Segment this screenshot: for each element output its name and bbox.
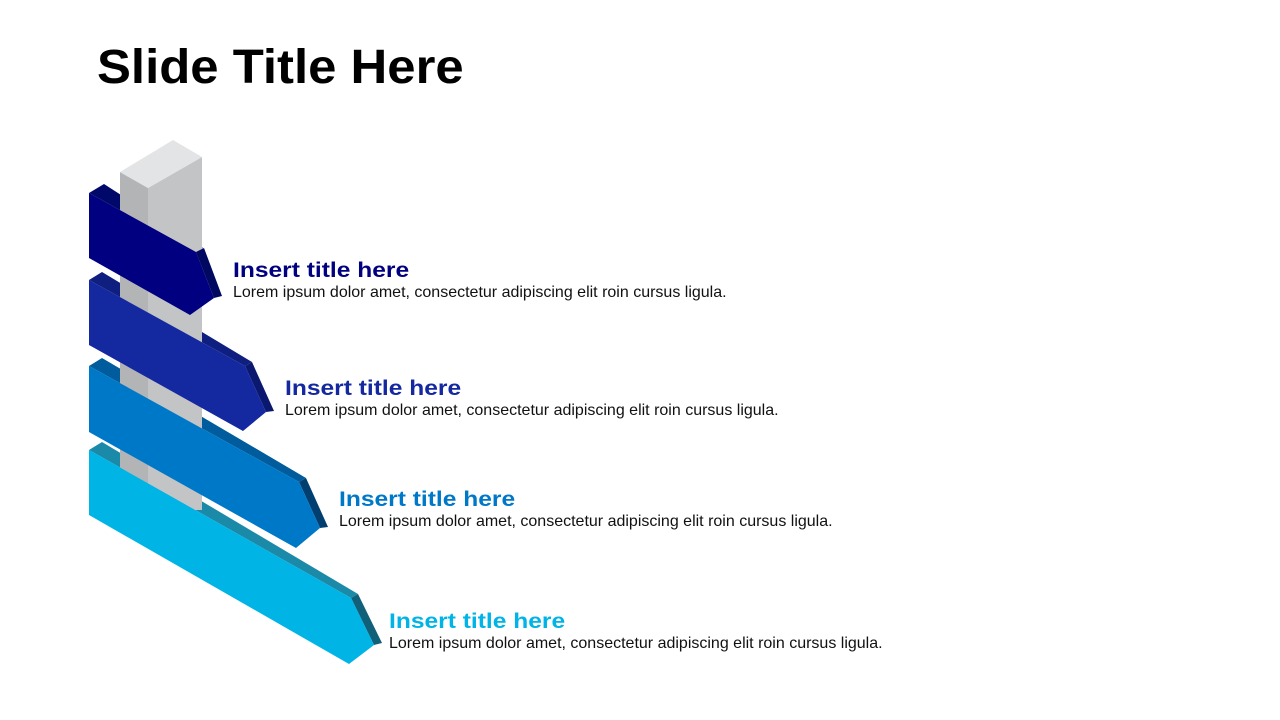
text block 1 [233,259,727,301]
text block 1: Insert title here [233,259,409,282]
arrow 1 [89,193,222,315]
text block 1: Lorem ipsum dolor amet, consectetur adipiscing elit roin cursus ligula. [233,284,727,301]
pillar [120,140,202,510]
text block 3: Insert title here [339,488,515,511]
text block 3: Lorem ipsum dolor amet, consectetur adipiscing elit roin cursus ligula. [339,513,833,530]
text block 2 [285,377,779,419]
text block 4: Insert title here [389,610,565,633]
text block 4: Lorem ipsum dolor amet, consectetur adipiscing elit roin cursus ligula. [389,635,883,652]
arrow 3 [89,366,328,548]
title: Slide Title Here [97,41,464,94]
text block 2: Insert title here [285,377,461,400]
arrow top strips (behind pillar) [89,184,358,598]
text block 3 [339,488,833,530]
arrow 2 [89,280,274,431]
text block 4 [389,610,883,652]
text block 2: Lorem ipsum dolor amet, consectetur adipiscing elit roin cursus ligula. [285,402,779,419]
arrow 4 [89,450,382,664]
